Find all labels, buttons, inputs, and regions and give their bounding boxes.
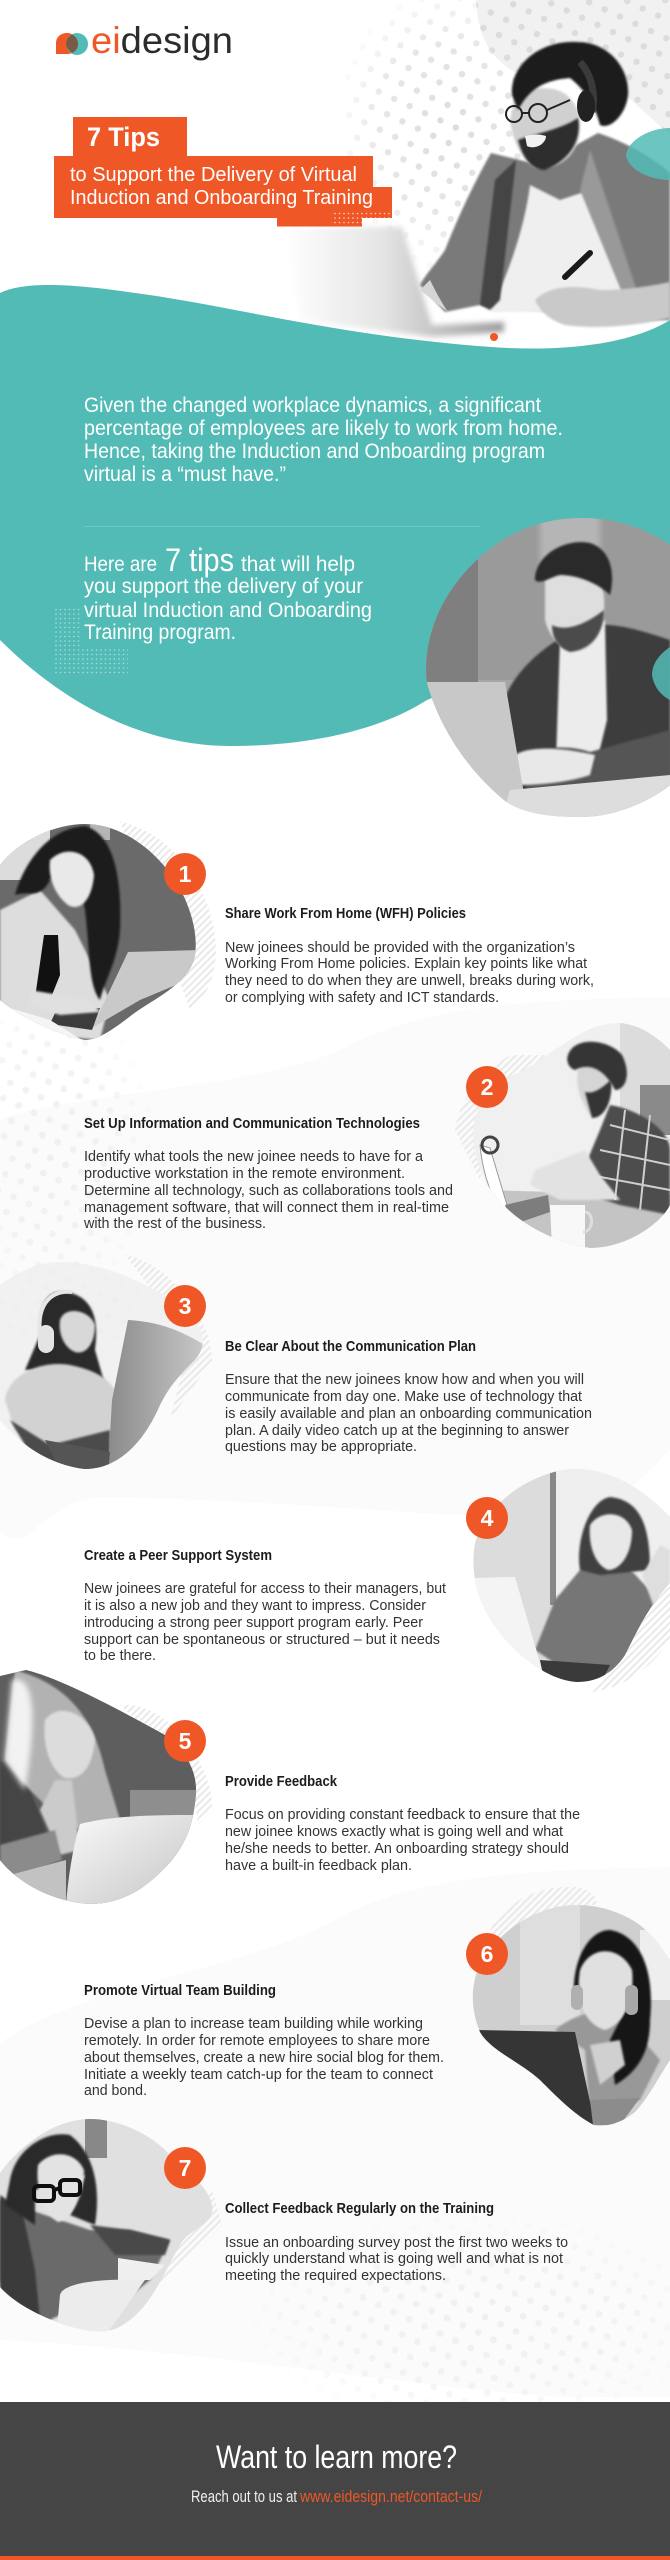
tip 5 text: new joinee knows exactly what is going well and what [225, 1823, 564, 1840]
tip 6 heading: Promote Virtual Team Building [84, 1982, 276, 1999]
glasses [506, 100, 570, 122]
intro text block: virtual is a “must have.” [84, 463, 286, 486]
title banner [54, 117, 392, 226]
black top [35, 935, 60, 1000]
arm [90, 2225, 170, 2255]
small teal blob: second photo [652, 647, 670, 700]
photo: smiling woman with headset [470, 1900, 670, 2130]
tips lead-in text block: you support the delivery of your [84, 575, 363, 598]
logo wordmark: eidesign [91, 20, 233, 61]
face [50, 852, 94, 907]
tip 3 heading: Be Clear About the Communication Plan [225, 1338, 476, 1355]
face [60, 1311, 95, 1353]
t-shirt [490, 185, 625, 312]
banner dot texture [331, 212, 392, 226]
intro text block: Given the changed workplace dynamics, a significant [84, 394, 541, 417]
laptop [472, 1577, 545, 1680]
blazer [504, 625, 670, 800]
photo: man in plaid shirt [465, 1020, 670, 1255]
face [37, 2154, 84, 2222]
tip 3 text: communicate from day one. Make use of technology that [225, 1388, 583, 1405]
laptop [476, 2030, 595, 2125]
tip 6 text: and bond. [84, 2082, 147, 2099]
tip 2 text: Identify what tools the new joinee needs to have for a [84, 1148, 424, 1165]
stripes behind photo [125, 1255, 212, 1420]
badge: 5: 5 [179, 1728, 192, 1754]
table [506, 775, 670, 817]
tip 7 text [225, 2234, 568, 2284]
hair [512, 42, 628, 126]
raised hand [642, 1545, 670, 1610]
hair [579, 1497, 650, 1575]
badge: 3: 3 [179, 1293, 191, 1319]
light background wave: lower [0, 1867, 670, 2397]
sweater [5, 1364, 120, 1445]
paper at bottom [10, 1860, 66, 1905]
photo: man in blazer at laptop [420, 510, 670, 830]
hero decorative dots and blob [347, 0, 670, 253]
tip 3 [0, 1255, 592, 1473]
tip 4 text [84, 1580, 447, 1664]
heading: 7 Tips: 7 Tips [87, 122, 160, 152]
shirt [0, 2200, 170, 2330]
halftone dots: bottom right [346, 2258, 620, 2396]
headphones [39, 1292, 72, 1335]
badge: 4 [466, 1497, 508, 1539]
hair [574, 1930, 651, 2085]
tip 6 text: Initiate a weekly team catch-up for the team to connect [84, 2066, 434, 2083]
tip 5 text: Focus on providing constant feedback to ensure that the [225, 1806, 580, 1823]
tip 2 text [83, 1148, 453, 1232]
shirt [0, 890, 110, 1040]
laptop screen [92, 950, 200, 1028]
glasses [34, 2180, 80, 2201]
laptop [480, 1144, 509, 1210]
headphones [580, 62, 594, 112]
headset [571, 1985, 583, 2010]
face [44, 1711, 95, 1778]
badge: 2: 2 [481, 1074, 493, 1100]
tip 2 text: productive workstation in the remote environment. [84, 1165, 405, 1182]
sleeve [0, 1830, 62, 1885]
badge: 2 [466, 1066, 508, 1108]
face [577, 1065, 612, 1116]
face [545, 569, 604, 651]
stripes behind photo [145, 2190, 222, 2295]
plaid shirt [588, 1104, 670, 1215]
photo: woman with glasses [0, 2115, 220, 2340]
logo [56, 20, 233, 61]
beard [585, 1080, 611, 1118]
photo: woman with long hair [0, 820, 200, 1045]
tip 5 text [225, 1806, 580, 1874]
tip 1 text: New joinees should be provided with the organization’s [225, 939, 575, 956]
tip 5 [0, 1665, 580, 1910]
tip 7 text: meeting the required expectations. [225, 2267, 446, 2284]
tips lead-in text block: Training program. [84, 621, 236, 644]
denim jacket [555, 2012, 660, 2115]
tip 4 text: New joinees are grateful for access to their managers, but [84, 1580, 447, 1597]
stripes behind photo [120, 822, 216, 1010]
badge: 6: 6 [481, 1941, 493, 1967]
stripes behind photo [120, 1705, 212, 1825]
hand and sleeve [526, 730, 670, 791]
laptop [66, 1815, 195, 1905]
heading: subtitle [70, 164, 373, 209]
badge: 1: 1 [179, 861, 192, 887]
footer panel [0, 2402, 670, 2560]
tips lead-in text block: 7 tips [165, 542, 234, 578]
tip 4 heading: Create a Peer Support System [84, 1547, 272, 1564]
banner shapes [54, 117, 392, 226]
heading: subtitle: Induction and Onboarding Training [70, 187, 373, 209]
badge: 6 [466, 1933, 508, 1975]
tip 1 heading: Share Work From Home (WFH) Policies [225, 905, 466, 922]
hair [5, 1670, 120, 1830]
hands [40, 1780, 80, 1855]
laptop [427, 682, 524, 802]
tip 4 text: it is also a new job and they want to impress. Consider [84, 1597, 426, 1614]
footer contact line: Reach out to us at [191, 2487, 297, 2506]
hair [535, 542, 612, 595]
tip 2 heading: Set Up Information and Communication Technologies [84, 1115, 420, 1132]
neck and face [510, 88, 580, 168]
photo: woman with headphones [0, 1258, 215, 1473]
pillow [118, 2258, 165, 2280]
face [590, 1514, 632, 1570]
tip 2 text: with the rest of the business. [83, 1215, 266, 1232]
tip 1 text [225, 939, 594, 1006]
footer heading: Want to learn more? [216, 2439, 457, 2475]
tip 7 [0, 2115, 568, 2340]
tip 3 text [225, 1371, 592, 1455]
hair [25, 1292, 105, 1385]
stripes behind photo [490, 1887, 596, 1945]
sweater [0, 1760, 60, 1880]
tip 5 heading: Provide Feedback [225, 1773, 338, 1790]
tip 3 text: Ensure that the new joinees know how and when you will [225, 1371, 584, 1388]
photo: woman waving [470, 1465, 670, 1685]
small teal blob: hero [626, 128, 670, 180]
jacket and arms [420, 133, 670, 320]
tip 5 text: have a built-in feedback plan. [225, 1857, 412, 1874]
stripes behind photo [455, 1055, 545, 1180]
tips lead-in text block [84, 542, 372, 644]
tip 2 [83, 1020, 670, 1255]
tip 1 text: or complying with safety and ICT standards. [225, 989, 499, 1006]
beard [518, 118, 579, 170]
intro text block: percentage of employees are likely to work from home. [84, 417, 563, 440]
stripes behind photo [590, 1570, 670, 1692]
tip 1 text: Working From Home policies. Explain key points like what [225, 955, 588, 972]
tip 3 text: plan. A daily video catch up at the beginning to answer [225, 1422, 569, 1439]
tip 4 text: support can be spontaneous or structured – but it needs [84, 1631, 440, 1648]
badge: 7 [164, 2147, 206, 2189]
badge: 1 [164, 853, 206, 895]
laptop [56, 2280, 145, 2340]
badge: 5 [164, 1720, 206, 1762]
hair [15, 826, 120, 1000]
forearm [530, 1150, 620, 1200]
tip 5 text: he/she needs to better. An onboarding strategy should [225, 1840, 569, 1857]
intro text block [84, 394, 563, 486]
tip 6 text: Devise a plan to increase team building while working [84, 2015, 423, 2032]
laptop [108, 1320, 205, 1470]
light background wave: upper [0, 997, 670, 1538]
icon: logo circles [56, 33, 88, 55]
face [579, 1951, 633, 2030]
tip 6 text [84, 2015, 444, 2099]
photo: man with headphones and laptop [285, 42, 670, 337]
tip 3 text: is easily available and plan an onboarding communication [225, 1405, 592, 1422]
tip 2 text: Determine all technology, such as collaborations tools and [84, 1182, 453, 1199]
tip 1 [0, 820, 594, 1045]
heading: subtitle: to Support the Delivery of Virtual [70, 164, 357, 186]
intro text block: Hence, taking the Induction and Onboarding program [84, 440, 545, 463]
teal dot texture [53, 607, 128, 676]
tip 1 text: they need to do when they are unwell, breaks during work, [225, 972, 594, 989]
pen [565, 253, 590, 277]
tip 6 text: about themselves, create a new hire social blog for them. [84, 2049, 444, 2066]
footer contact line: www.eidesign.net/contact-us/ [299, 2487, 482, 2506]
tip 3 text: questions may be appropriate. [225, 1438, 417, 1455]
forearm and hand [535, 282, 670, 327]
dress [535, 1563, 660, 1680]
tips lead-in text block: that will help [241, 553, 355, 576]
halftone dots: left [0, 1034, 118, 1248]
hair [5, 2134, 97, 2225]
badge: 3 [164, 1285, 206, 1327]
table [480, 1190, 670, 1250]
tip 7 text: Issue an onboarding survey post the first two weeks to [225, 2234, 568, 2251]
tip 2 text: management software, that will connect them in real-time [84, 1199, 449, 1216]
hair [567, 1042, 627, 1090]
hands [590, 2040, 625, 2085]
tip 7 text: quickly understand what is going well and what is not [225, 2250, 564, 2267]
shirt [554, 620, 608, 754]
tip 4 text: introducing a strong peer support program early. Peer [84, 1614, 423, 1631]
tips lead-in text block: Here are [84, 553, 157, 576]
tip 6 [84, 1887, 670, 2130]
beard [552, 610, 604, 652]
photo: woman lying with laptop [0, 1665, 200, 1910]
tips lead-in text block: virtual Induction and Onboarding [84, 599, 372, 622]
badge: 4: 4 [481, 1505, 494, 1531]
teal wave panel [0, 285, 670, 746]
mug [550, 1205, 585, 1248]
sleeve and hands [10, 1420, 110, 1470]
tip 4 [84, 1465, 670, 1692]
tip 6 text: remotely. In order for remote employees to share more [84, 2032, 430, 2049]
keyboard and hands [50, 1008, 100, 1030]
tip 4 text: to be there. [84, 1647, 156, 1664]
laptop [285, 227, 504, 337]
tip 7 heading: Collect Feedback Regularly on the Training [225, 2200, 494, 2217]
orange dot [490, 333, 498, 341]
badge: 7: 7 [179, 2155, 191, 2181]
